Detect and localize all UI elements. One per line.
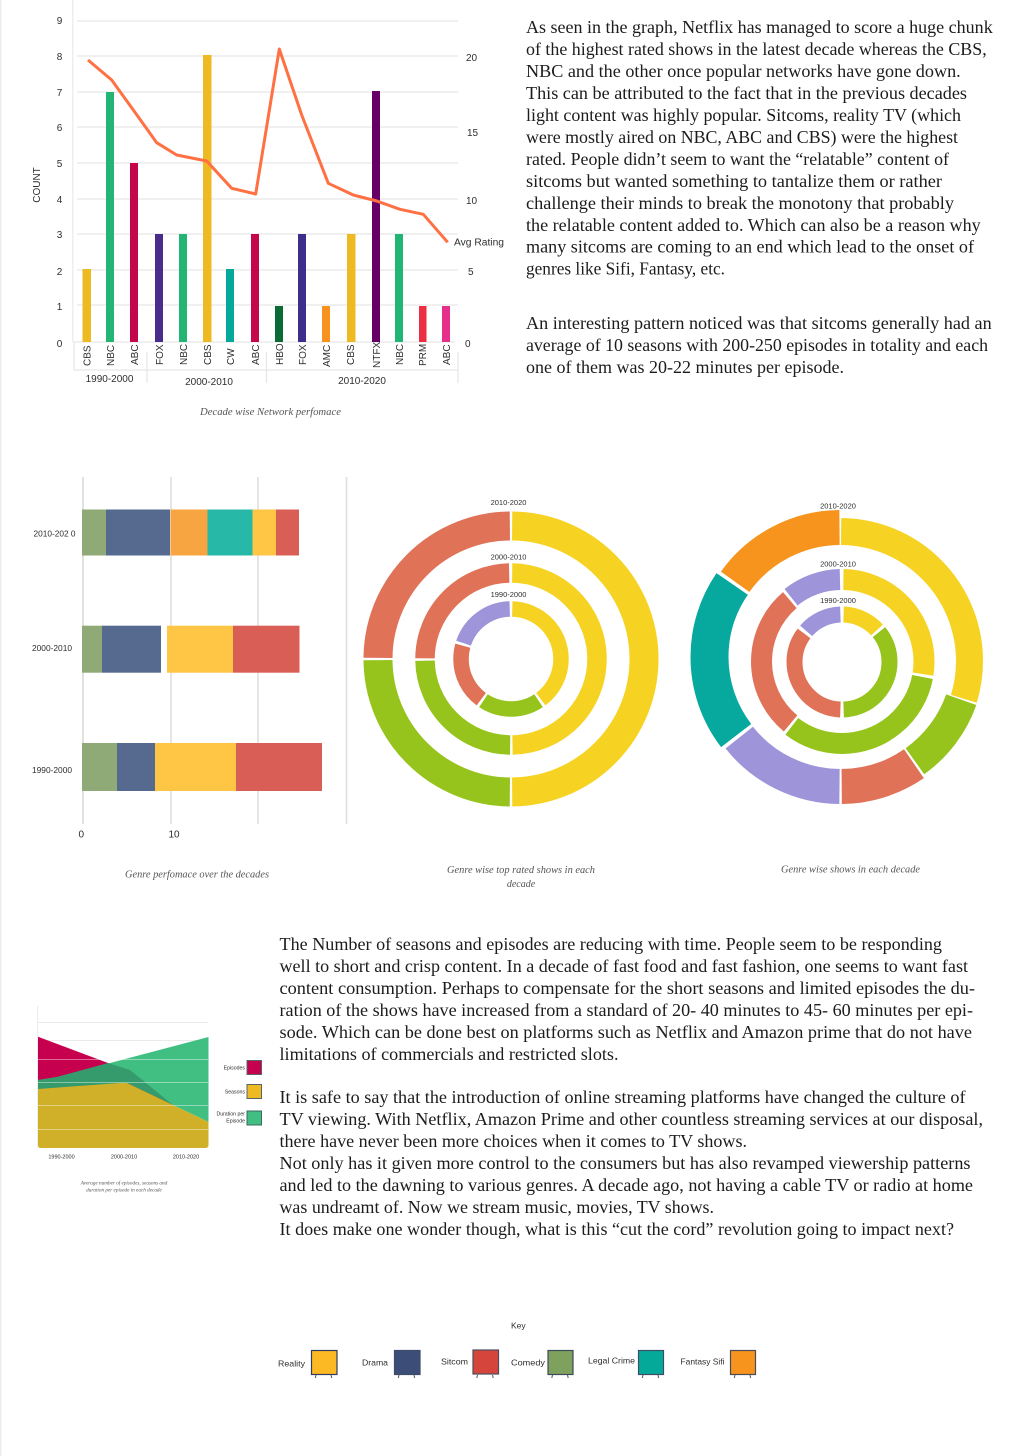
ring labels: 1990-2000 (491, 590, 526, 599)
outer ring 2010-2020 (710, 528, 970, 790)
text block: sitcom pattern (526, 313, 992, 377)
legend: duration per episode: Episode (226, 1118, 245, 1124)
text block: streaming conclusion: It is safe to say that the introduction of online streaming platforms have changed the culture of (280, 1087, 966, 1107)
key: legal crime (588, 1350, 664, 1378)
text block: network analysis (526, 17, 993, 278)
text block: streaming conclusion (280, 1087, 983, 1239)
network category labels: CW (226, 348, 237, 365)
network category labels (82, 342, 453, 368)
text block: sitcom pattern: one of them was 20-22 minutes per episode. (526, 357, 844, 377)
ring labels: 2010-2020 (491, 498, 526, 507)
key: legal crime: Legal Crime (588, 1356, 635, 1366)
ring labels: 2000-2010 (820, 560, 856, 568)
middle ring 2000-2010 (760, 580, 924, 744)
network category labels: HBO (275, 343, 286, 365)
text block: streaming conclusion: there have never been more choices when it comes to TV shows. (280, 1131, 747, 1151)
left axis numbers: 1 (57, 302, 63, 313)
text block: network analysis: rated. People didn’t seem to want the “relatable” content of (526, 149, 949, 169)
key: reality: Reality (278, 1358, 306, 1368)
x axis labels: 2000-2010 (111, 1154, 137, 1160)
y axis title: COUNT (32, 167, 43, 203)
average rating label: Avg Rating (454, 238, 504, 248)
chart caption: Average number of episodes, seasons and (80, 1180, 168, 1186)
key: fantasy sifi: Fantasy Sifi (680, 1356, 725, 1366)
network category labels: CBS (203, 344, 214, 365)
text block: network analysis: the relatable content added to. Which can also be a reason why (526, 215, 981, 235)
right axis numbers: 15 (467, 128, 479, 139)
chart caption: Decade wise Network perfomace (199, 407, 342, 418)
bar: 2010-2020 (82, 510, 299, 556)
ring labels: 2010-2020 (820, 502, 856, 510)
text block: network analysis: challenge their minds to break the monotony that probably (526, 193, 954, 213)
network category labels: CBS (82, 345, 94, 366)
chart caption (447, 865, 595, 890)
text block: seasons and episodes: The Number of seasons and episodes are reducing with time. People seem to be responding (280, 934, 942, 954)
key: sitcom: Sitcom (441, 1356, 468, 1366)
text block: streaming conclusion: It does make one wonder though, what is this “cut the cord” revolution going to impact next? (280, 1219, 954, 1239)
network category labels: FOX (155, 344, 166, 365)
middle ring 2000-2010 (425, 573, 597, 745)
area chart: episodes, seasons, duration (37, 1006, 262, 1194)
legend: episodes (224, 1060, 262, 1074)
genre key (278, 1320, 756, 1378)
outer ring 2010-2020 (378, 526, 644, 792)
x axis labels: 1990-2000 (48, 1154, 75, 1160)
text block: network analysis: many sitcoms are coming to an end which lead to the onset of (526, 236, 974, 256)
text block: streaming conclusion: and led to the dawning to various genres. A decade ago, not having a cable TV or radio at home (280, 1175, 973, 1195)
network category labels: NTFX (372, 342, 383, 368)
duration area (38, 1037, 208, 1122)
network category labels: NBC (106, 345, 117, 366)
text block: network analysis: light content was highly popular. Sitcoms, reality TV (which (526, 105, 961, 125)
left axis numbers: 7 (57, 88, 63, 99)
episodes area (38, 1037, 173, 1105)
network category labels: PRM (418, 344, 429, 366)
key: comedy: Comedy (511, 1358, 546, 1368)
text block: streaming conclusion: TV viewing. With Netflix, Amazon Prime and other countless streaming services at our disposal, (280, 1109, 983, 1129)
network count bars (82, 55, 450, 342)
ring labels: 2000-2010 (491, 552, 526, 562)
key: comedy (511, 1350, 573, 1378)
decade labels: 2000-2010 (185, 377, 233, 388)
stacked bar chart: genre performance (32, 477, 346, 880)
chart caption: duration per episode in each decade (86, 1188, 163, 1194)
chart caption: Genre perfomace over the decades (125, 870, 269, 880)
left axis numbers: 5 (57, 159, 63, 170)
bar labels: 1990-2000 (32, 765, 72, 775)
bar: 1990-2000 (82, 743, 322, 791)
text block: network analysis: NBC and the other once popular networks have gone down. (526, 61, 961, 81)
average rating line (88, 49, 448, 242)
left axis numbers: 0 (57, 339, 63, 350)
text block: network analysis: sitcoms but wanted something to tantalize them or rather (526, 171, 942, 191)
left axis numbers: 8 (57, 52, 63, 63)
network category labels: ABC (442, 344, 453, 365)
x axis labels (48, 1154, 199, 1160)
text block: streaming conclusion: was undreamt of. Now we stream music, movies, TV shows. (280, 1197, 714, 1217)
key: sitcom (441, 1350, 498, 1378)
chart caption: Genre wise shows in each decade (781, 864, 921, 876)
right axis numbers (465, 53, 479, 350)
text block: seasons and episodes: well to short and crisp content. In a decade of fast food and fast fashion, one seems to want fast (280, 956, 968, 976)
text block: seasons and episodes: ration of the shows have increased from a standard of 20- 40 minutes to 45- 60 minutes per epi- (280, 1000, 973, 1020)
inner ring 1990-2000 (794, 614, 890, 710)
text block: network analysis: genres like Sifi, Fantasy, etc. (526, 258, 725, 278)
decade labels: 2010-2020 (338, 376, 386, 387)
bar labels (32, 528, 180, 840)
key title: Key (511, 1320, 526, 1330)
legend: seasons (225, 1084, 262, 1098)
text block: network analysis: This can be attributed to the fact that in the previous decades (526, 83, 967, 103)
decade labels: 1990-2000 (86, 374, 134, 385)
text block: streaming conclusion: Not only has it given more control to the consumers but has also revamped viewership patterns (280, 1153, 971, 1173)
text block: network analysis: As seen in the graph, Netflix has managed to score a huge chunk (526, 17, 993, 37)
donut chart: genre wise top rated shows (378, 498, 644, 890)
network category labels: ABC (130, 344, 141, 365)
chart caption (80, 1180, 168, 1194)
text block: seasons and episodes: sode. Which can be done best on platforms such as Netflix and Amazon prime that do not have (280, 1022, 972, 1042)
key: drama: Drama (362, 1358, 388, 1368)
inner ring 1990-2000 (461, 609, 561, 709)
text block: network analysis: were mostly aired on NBC, ABC and CBS) were the highest (526, 127, 958, 147)
bar labels: 2000-2010 (32, 643, 72, 653)
chart caption: Genre wise top rated shows in each (447, 865, 595, 876)
key: drama (362, 1350, 420, 1378)
network category labels: ABC (251, 344, 262, 365)
left axis numbers: 6 (57, 123, 63, 134)
ring labels (820, 502, 856, 605)
bar labels: 10 (168, 830, 180, 840)
right axis numbers: 0 (465, 339, 471, 350)
text block: seasons and episodes: limitations of commercials and restricted slots. (280, 1044, 618, 1064)
left axis numbers: 4 (57, 195, 63, 206)
chart caption: decade (507, 879, 536, 890)
right axis numbers: 10 (466, 196, 478, 207)
network category labels: NBC (395, 344, 406, 365)
text block: sitcom pattern: An interesting pattern noticed was that sitcoms generally had an (526, 313, 992, 333)
network category labels: AMC (322, 345, 333, 367)
legend: duration per episode: Duration per (216, 1112, 245, 1118)
network category labels: FOX (298, 344, 309, 365)
text block: seasons and episodes: content consumption. Perhaps to compensate for the short seasons and limited episodes the du- (280, 978, 975, 998)
legend: duration per episode (216, 1111, 262, 1125)
decade labels (86, 374, 386, 388)
left axis numbers (57, 16, 63, 350)
legend: seasons: Seasons (225, 1090, 245, 1096)
donut chart: genre wise shows (710, 502, 970, 876)
bar: 2000-2010 (82, 626, 300, 673)
overlap area (38, 1063, 173, 1105)
key: fantasy sifi (680, 1350, 756, 1378)
text block: network analysis: of the highest rated shows in the latest decade whereas the CBS, (526, 39, 987, 59)
right axis numbers: 20 (466, 53, 478, 64)
bar and line chart: decade wise network performance (32, 0, 504, 418)
ring labels: 1990-2000 (820, 596, 856, 605)
text block: seasons and episodes (280, 934, 975, 1064)
key: reality (278, 1350, 337, 1378)
network category labels: CBS (346, 344, 357, 365)
bar labels: 2010-202 0 (34, 528, 76, 538)
left axis numbers: 3 (57, 230, 63, 241)
ring labels (491, 498, 526, 599)
right axis numbers: 5 (468, 267, 474, 278)
left axis numbers: 2 (57, 267, 63, 278)
left axis numbers: 9 (57, 16, 63, 27)
seasons area (38, 1083, 208, 1148)
network category labels: NBC (179, 344, 190, 365)
legend: episodes: Episodes (224, 1066, 245, 1072)
text block: sitcom pattern: average of 10 seasons with 200-250 episodes in totality and each (526, 335, 988, 355)
bar labels: 0 (78, 830, 84, 840)
x axis labels: 2010-2020 (173, 1154, 199, 1160)
